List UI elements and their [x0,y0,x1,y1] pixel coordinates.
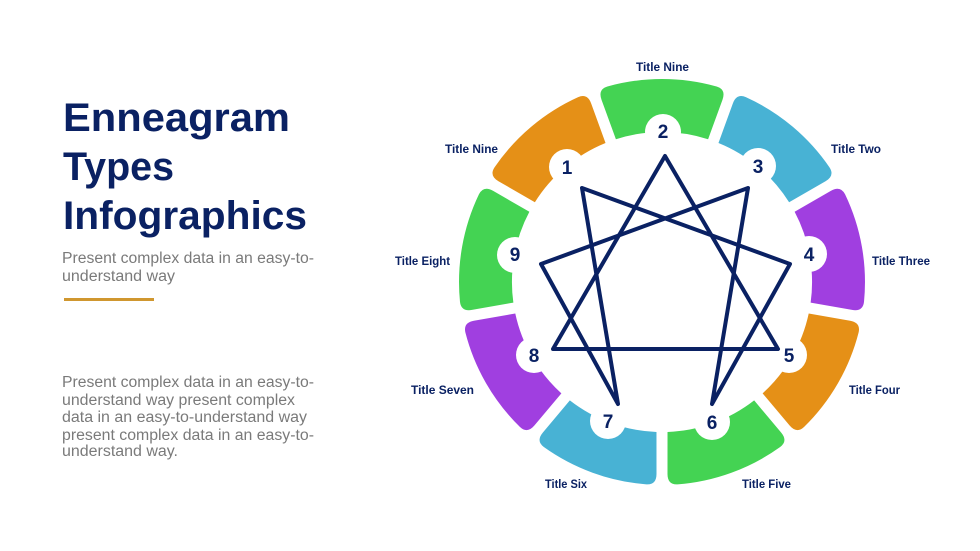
numbers: 7 [603,412,613,433]
title [63,96,307,238]
segment labels: Title Nine [445,142,498,156]
segment 1 [484,87,617,212]
segment 5 [755,300,869,437]
segment 9 [451,186,532,318]
body paragraph [62,374,314,460]
enneagram star lines [541,156,790,404]
segment labels: Title Eight [395,254,450,268]
body paragraph: Present complex data in an easy-to- [62,374,314,391]
body paragraph: understand way. [62,443,178,460]
numbers: 4 [804,245,815,266]
numbers: 2 [658,122,668,143]
segment labels: Title Four [849,383,900,397]
accent rule [64,298,154,301]
numbers: 1 [562,158,573,179]
segment 2 [600,79,724,139]
numbers: 8 [529,346,539,367]
title: Types [63,145,174,189]
segment labels: Title Five [742,477,791,491]
subtitle text: Present complex data in an easy-to- [62,250,314,267]
body paragraph: understand way present complex [62,392,295,409]
numbers [510,122,815,434]
segment 3 [707,87,840,212]
numbers: 6 [707,413,717,434]
title: Enneagram [63,96,290,140]
enneagram wheel [451,79,873,494]
segment 8 [455,300,569,437]
number badges [497,114,827,440]
numbers: 9 [510,245,520,266]
title: Infographics [63,194,307,238]
numbers: 5 [784,346,795,367]
segment labels: Title Seven [411,383,474,397]
subtitle text [62,250,314,285]
body paragraph: data in an easy-to-understand way [62,409,307,426]
segment labels: Title Six [545,477,587,491]
subtitle text: understand way [62,268,175,285]
body paragraph: present complex data in an easy-to- [62,427,314,444]
segment 7 [535,395,671,494]
segment labels: Title Nine [636,60,689,74]
segment 6 [653,395,789,494]
numbers: 3 [753,157,763,178]
segment 4 [792,186,873,318]
segment labels: Title Two [831,142,881,156]
segment labels: Title Three [872,254,930,268]
segment labels [395,60,930,491]
